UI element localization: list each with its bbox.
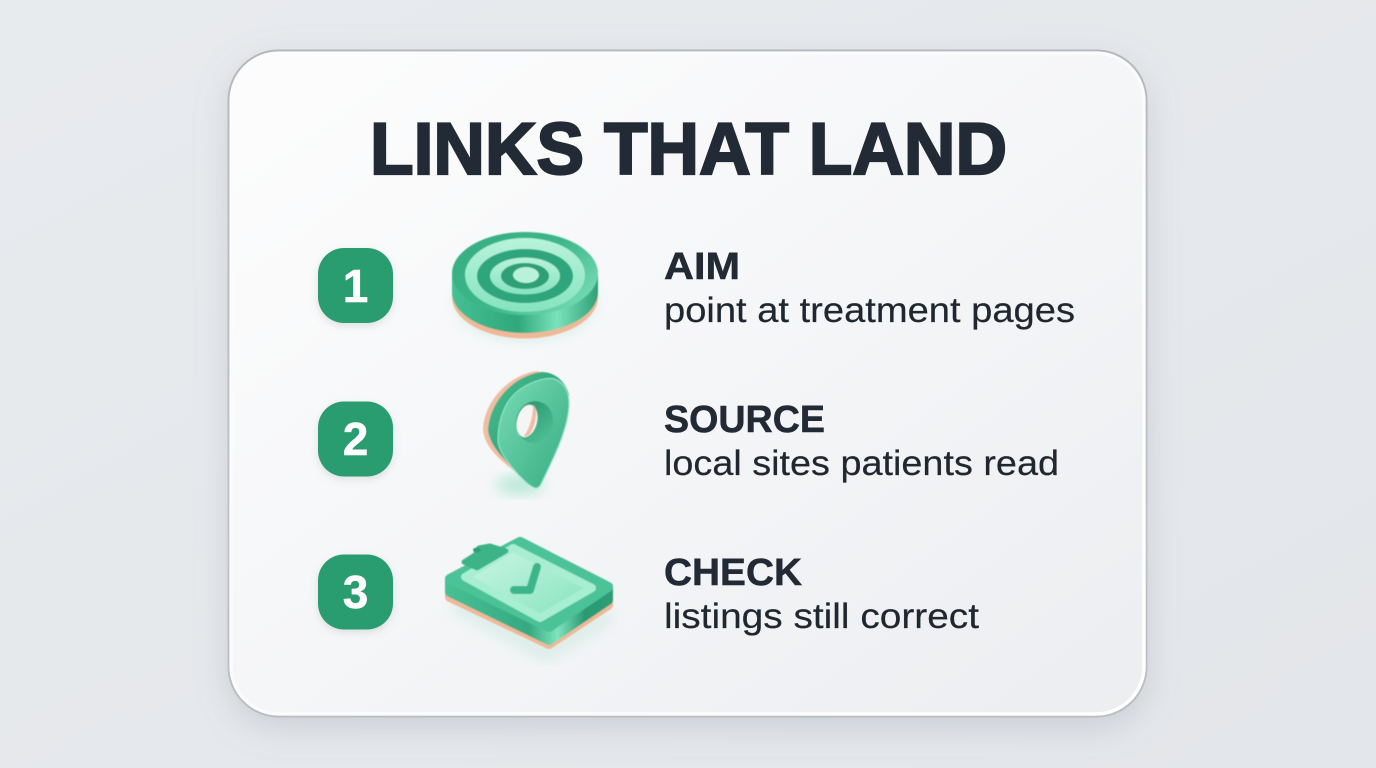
- panel: card: [228, 50, 1146, 716]
- description: aim: point at treatment pages: [664, 291, 1075, 330]
- step 2: source: [318, 371, 1059, 494]
- step 1: aim: [318, 232, 1075, 340]
- label: check: CHECK: [664, 552, 803, 594]
- label: source: SOURCE: [664, 399, 825, 441]
- title: LINKS THAT LAND: [370, 109, 1007, 190]
- label: aim: AIM: [664, 246, 740, 288]
- number badge 1: [318, 248, 393, 323]
- description: source: local sites patients read: [664, 444, 1059, 483]
- number badge 3: 3: [343, 566, 368, 618]
- number badge 3: [318, 554, 393, 630]
- description: check: listings still correct: [664, 597, 979, 636]
- step 3: check: [318, 542, 979, 654]
- icon: clipboard: [450, 542, 610, 654]
- icon: target: [452, 232, 598, 340]
- number badge 2: 2: [343, 413, 368, 465]
- clipboard clip: [464, 546, 506, 568]
- check mark: [514, 567, 537, 590]
- icon: map pin: [483, 371, 569, 494]
- number badge 2: [318, 402, 393, 476]
- number badge 1: 1: [343, 260, 368, 312]
